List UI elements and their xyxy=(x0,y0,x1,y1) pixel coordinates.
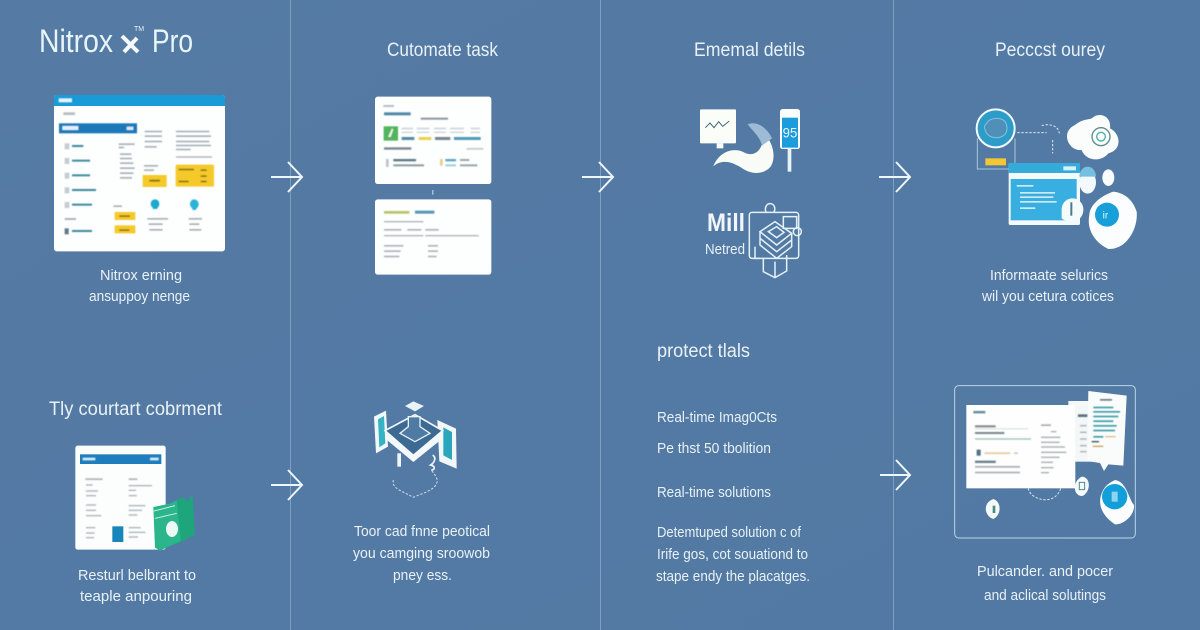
title: TM xyxy=(134,26,144,33)
icon group: monitor, swoosh and gauge: 95 xyxy=(783,125,798,141)
text block: protect description: stape endy the placatges. xyxy=(656,569,810,585)
text block: middle caption: pney ess. xyxy=(393,568,452,584)
text block: bottom left caption: teaple anpouring xyxy=(80,589,192,605)
arrow xyxy=(271,470,302,500)
icon group: monitor, swoosh and gauge xyxy=(700,109,800,173)
text block: process caption: Informaate selurics xyxy=(990,268,1108,284)
text block: protect description: Detemtuped solution c of xyxy=(657,525,802,541)
text block: report caption: and aclical solutings xyxy=(984,588,1106,604)
illustration: brain, cloud and browser xyxy=(977,109,1137,249)
panel: dashboard screen xyxy=(54,95,225,251)
text block: protect list: Real-time Imag0Cts xyxy=(657,410,777,426)
text block: first step: Nitrox erning xyxy=(100,268,182,284)
text block: protect list: Pe thst 50 tbolition xyxy=(657,441,771,457)
text block: process caption: wil you cetura cotices xyxy=(981,289,1114,305)
panel: automate task screens xyxy=(375,97,491,275)
title: Nitrox xyxy=(39,23,113,59)
arrow xyxy=(271,162,302,192)
heading: protect: protect tlals xyxy=(657,341,750,362)
title: Pro xyxy=(152,23,193,59)
panel: framed report illustration xyxy=(955,386,1135,538)
heading: process: Pecccst ourey xyxy=(995,40,1105,61)
text block: report caption xyxy=(977,564,1113,604)
text block: process caption xyxy=(981,268,1114,305)
text block: middle caption: you camging sroowob xyxy=(353,546,490,562)
text block: protect list: Real-time solutions xyxy=(657,485,771,501)
heading: details: Ememal detils xyxy=(694,40,805,61)
text block: bottom left caption xyxy=(78,568,196,605)
text block: report caption: Pulcander. and pocer xyxy=(977,564,1113,580)
text block: bottom left caption: Resturl belbrant to xyxy=(78,568,196,584)
text block: protect list xyxy=(657,410,777,501)
arrow xyxy=(880,460,910,490)
text block: middle caption: Toor cad fnne peotical xyxy=(354,524,490,540)
illustration: brain, cloud and browser: ir xyxy=(1103,210,1109,221)
heading: automate: Cutomate task xyxy=(387,40,498,61)
panel: document with green files xyxy=(75,446,195,551)
icon: isometric desk xyxy=(374,401,457,497)
arrow xyxy=(582,162,613,192)
text block: middle caption xyxy=(353,524,490,584)
text block: protect description: Irife gos, cot souationd to xyxy=(657,547,808,563)
text block: first step xyxy=(89,268,190,305)
heading: bottom left: Tly courtart cobrment xyxy=(49,399,223,420)
text label: Netred: Netred xyxy=(705,242,745,258)
icon: isometric outline xyxy=(749,204,801,278)
arrow xyxy=(879,162,910,192)
text label: Mill: Mill xyxy=(707,209,745,237)
title xyxy=(39,23,193,59)
text block: first step: ansuppoy nenge xyxy=(89,289,190,305)
text block: protect description xyxy=(656,525,810,585)
